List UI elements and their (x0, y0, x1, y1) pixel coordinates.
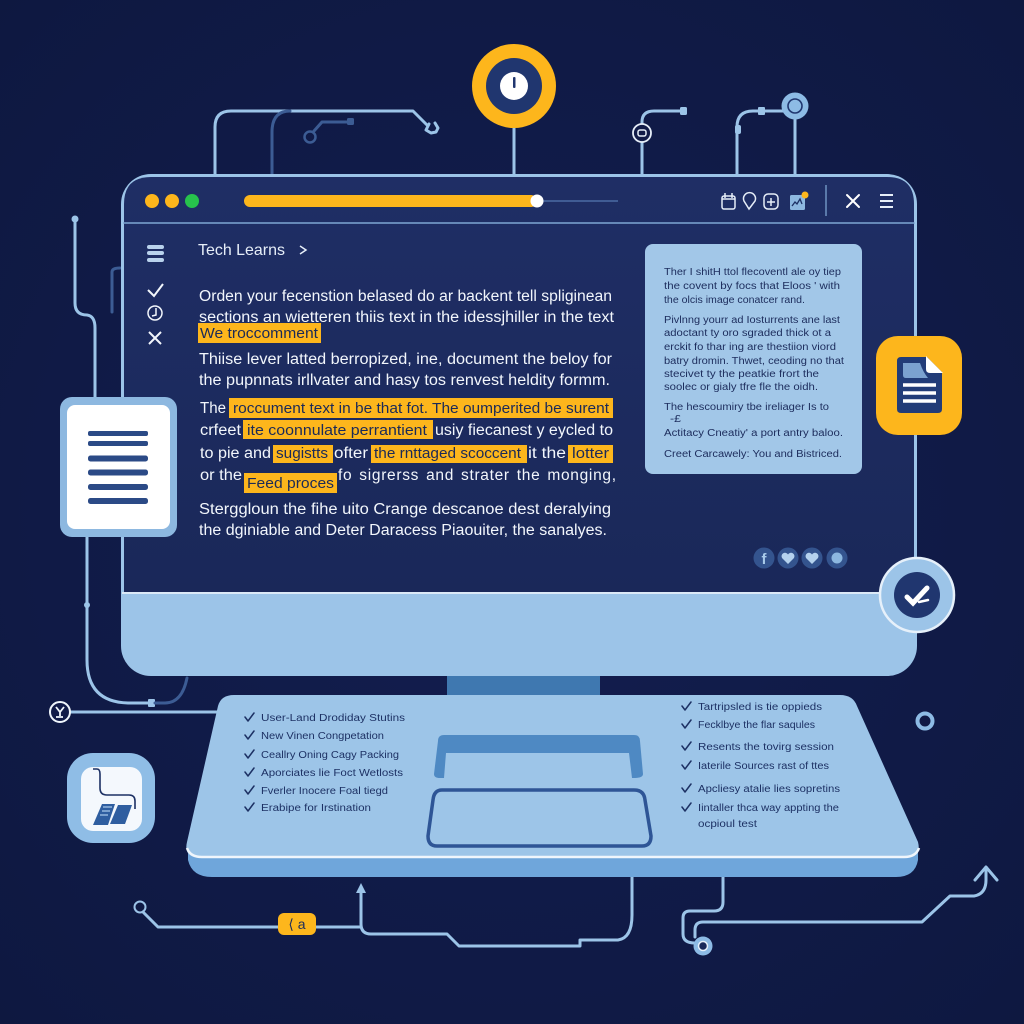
right checklist: Tartripsled is tie oppieds (698, 702, 822, 713)
icon: check (148, 284, 163, 296)
icon: close (149, 332, 161, 344)
icon: yellow document badge (876, 336, 962, 435)
icon: clock (148, 306, 162, 320)
paragraph 3 with highlights: ite coonnulate perrantient (247, 422, 428, 439)
left checklist (245, 713, 405, 814)
paragraph 4: the dginiable and Deter Daracess Piaouiter, the sanalyes. (199, 522, 607, 539)
side note panel: The hescoumiry tbe ireliager Is to (664, 402, 829, 413)
breadcrumb heading: Tech Learns (198, 242, 285, 259)
paragraph 3 with highlights: sugistts (276, 445, 328, 462)
right checklist: Fecklbye the flar saqules (698, 720, 815, 731)
main text block (198, 288, 616, 539)
side note panel: stecivet ty the peatkie frort the (664, 369, 820, 380)
right checklist: Apcliesy atalie lies sopretins (698, 784, 840, 795)
right checklist: ocpioul test (698, 819, 757, 830)
icon: heart two (802, 548, 822, 568)
icon: menu (880, 195, 893, 207)
paragraph 4 (199, 501, 611, 539)
icon: list (147, 245, 164, 262)
right checklist: Iaterile Sources rast of ttes (698, 761, 829, 772)
paragraph 3 with highlights: fo sigrerss and strater the monging, (338, 467, 616, 484)
side note panel: Pivlnng yourr ad Iosturrents ane last (664, 315, 840, 326)
side note panel: batry dromin. Thwet, ceoding no that (664, 356, 844, 367)
paragraph 3 with highlights: the rnttaged scoccent (374, 445, 522, 462)
paragraph 4: Sterggloun the fihe uito Crange descanoe dest deralying (199, 501, 611, 518)
paragraph 3 with highlights: lotter (572, 445, 609, 462)
icon: close (847, 195, 859, 207)
side note panel: erckit fo thar ing are thestiion viord (664, 342, 836, 353)
paragraph 1 (198, 288, 615, 343)
sidebar icons (147, 245, 164, 344)
icon: heart one (778, 548, 798, 568)
left checklist: Ceallry Oning Cagy Packing (261, 750, 399, 761)
right checklist: Iintaller thca way appting the (698, 803, 839, 814)
paragraph 1: Orden your fecenstion belased do ar backent tell spliginean (199, 288, 612, 305)
paragraph 1: sections an wietteren thiis text in the idessjhiller in the text (199, 309, 615, 326)
keyboard top (186, 695, 919, 858)
icon: pin (744, 193, 755, 209)
monitor stand (447, 670, 600, 698)
paragraph 1: We troccomment (200, 325, 319, 342)
paragraph 3 with highlights: usiy fiecanest y eycled to (435, 422, 613, 439)
connector wires: bottom (134, 867, 997, 946)
trackpad (428, 790, 651, 846)
icon: chart badge (790, 192, 808, 210)
side note panel: the covent by focs that Eloos ' with (664, 281, 840, 292)
paragraph 3 with highlights: crfeet (200, 422, 242, 439)
icon: calendar (722, 193, 735, 209)
monitor screen (124, 177, 914, 593)
icon: dot (826, 548, 848, 568)
paragraph 3 with highlights (200, 398, 616, 493)
progress bar (244, 194, 618, 208)
badge: bottom wire label: ⟨ a (288, 916, 306, 932)
side note panel (645, 244, 862, 474)
key recess (434, 735, 643, 778)
paragraph 3 with highlights: it the (528, 445, 566, 462)
paragraph 3 with highlights: ofter (334, 445, 368, 462)
left checklist: New Vinen Congpetation (261, 731, 384, 742)
left checklist: Erabipe for Irstination (261, 803, 371, 814)
side note panel: Creet Carcawely: You and Bistriced. (664, 449, 842, 460)
social icons (754, 548, 848, 568)
icon: small node left (50, 702, 70, 722)
monitor (121, 174, 917, 698)
icon: small lock node (633, 124, 651, 142)
right checklist (682, 702, 840, 830)
paragraph 2: Thiise lever latted berropized, ine, document the beloy for (199, 351, 612, 368)
paragraph 2 (199, 351, 612, 389)
side note panel: Actitacy Cneatiy' a port antry baloo. (664, 428, 843, 439)
left checklist: User-Land Drodiday Stutins (261, 713, 405, 724)
icon: chair and book tile (67, 753, 155, 843)
side note panel: soolec or gialy tfre fle the oidh. (664, 382, 818, 393)
icon: document card (60, 397, 177, 537)
paragraph 3 with highlights: Feed proces (247, 475, 334, 492)
paragraph 3 with highlights: or the (200, 467, 242, 484)
side note panel: Ther I shitH ttol flecoventl ale oy tiep (664, 267, 841, 278)
paragraph 3 with highlights: The (200, 400, 226, 417)
icon: bottom ring node (694, 936, 712, 956)
icon: clock badge (472, 44, 556, 128)
icon: ring node (782, 92, 808, 120)
side note panel: the olcis image conatcer rand. (664, 295, 805, 306)
badge: bottom wire label (278, 913, 316, 935)
connector wires: left side (70, 216, 218, 712)
icon: check badge (880, 558, 954, 632)
side note panel: -£ (670, 414, 682, 425)
paragraph 3 with highlights: roccument text in be that fot. The oumperited be surent (233, 400, 610, 417)
toolbar icons (722, 185, 893, 216)
paragraph 3 with highlights: to pie and (200, 445, 271, 462)
connector wires: top (215, 107, 795, 175)
icon: document grid (764, 194, 778, 209)
left checklist: Fverler Inocere Foal tiegd (261, 786, 388, 797)
keyboard side (188, 848, 918, 877)
right checklist: Resents the tovirg session (698, 742, 834, 753)
window controls (145, 194, 199, 208)
monitor body (121, 174, 917, 676)
side note panel: adoctant ty oro sgraded thick ot a (664, 328, 831, 339)
paragraph 2: the pupnnats irllvater and hasy tos renvest heldity formm. (199, 372, 610, 389)
left checklist: Aporciates lie Foct Wetlosts (261, 768, 403, 779)
keyboard base (186, 695, 919, 877)
icon: ring right (918, 714, 932, 728)
icon: facebook: f (762, 551, 768, 568)
